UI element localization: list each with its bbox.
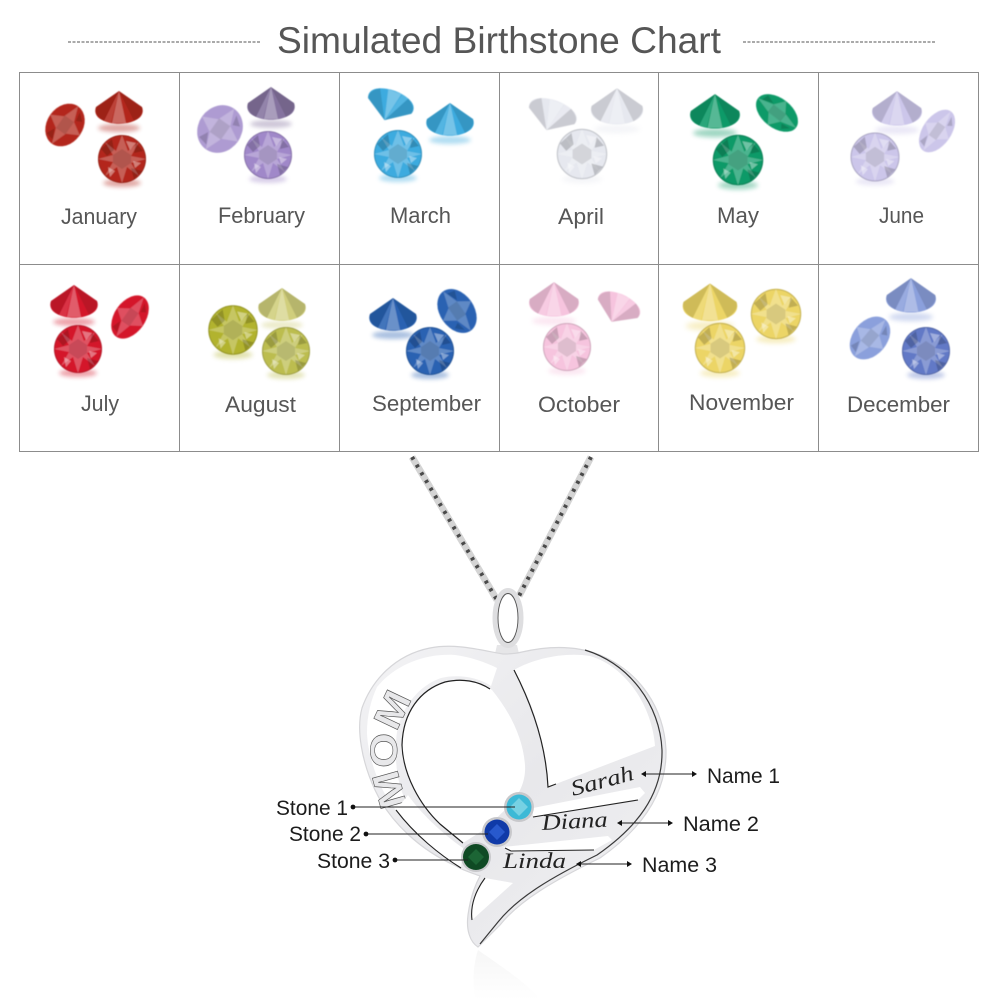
cutout: inner heart [402,680,525,843]
callout: name labels: Name 1 [707,765,780,788]
cell: October: October [538,392,620,417]
cell: November [683,283,801,415]
cell: December [841,278,950,417]
cell: June: June [879,203,924,228]
callout: stone labels: Stone 2 [289,823,361,846]
chain [412,457,591,600]
cell: September: September [372,391,481,416]
cell: September [369,282,485,416]
cutout: top crescent with MOM [367,655,497,810]
cell: April: April [558,204,604,229]
callout: stone labels [276,797,515,873]
callout: name labels [576,765,780,877]
MOM letters: MOM [370,689,412,809]
cutout: name slot 2 [503,836,612,851]
cell: January [37,91,146,229]
cell: May [690,87,805,228]
cell: December: December [847,392,950,417]
callout: stone labels: Stone 1 [276,797,348,820]
cell: March [362,83,474,228]
cell: January: January [61,204,137,229]
cell: March: March [390,203,451,228]
name: Linda: Linda [502,848,566,873]
bail ring [494,591,520,658]
heart body [360,646,666,947]
panel: birthstone chart [19,72,979,452]
cutout: name slot 1 [533,787,645,817]
cell: May: May [717,203,759,228]
cell: August: August [225,392,296,417]
icon: reflection [474,950,540,1000]
name: Sarah: Sarah [568,760,636,801]
stone 1 [504,792,534,822]
outer right edge shadow [480,650,662,944]
cell: July: July [81,391,119,416]
cutout: bottom triangle [472,878,513,920]
callout: stone labels: Stone 3 [317,850,390,873]
heart pendant [359,588,667,948]
cell: February: February [218,203,305,228]
callout: name labels: Name 3 [642,854,717,877]
cell: July [50,285,157,416]
cell: August [208,288,310,417]
title: Simulated Birthstone Chart [277,20,722,61]
callout: name labels: Name 2 [683,813,759,836]
cell: June [851,91,962,228]
cell: April [523,88,643,229]
cell: February [188,87,305,228]
stone 2 [482,817,512,847]
name: Diana: Diana [540,807,608,835]
cell: November: November [689,390,794,415]
cutout: right lobe [514,655,655,787]
cutout: lower left crescent [396,795,463,868]
cell: October [529,282,644,417]
stone 3 [461,842,491,872]
